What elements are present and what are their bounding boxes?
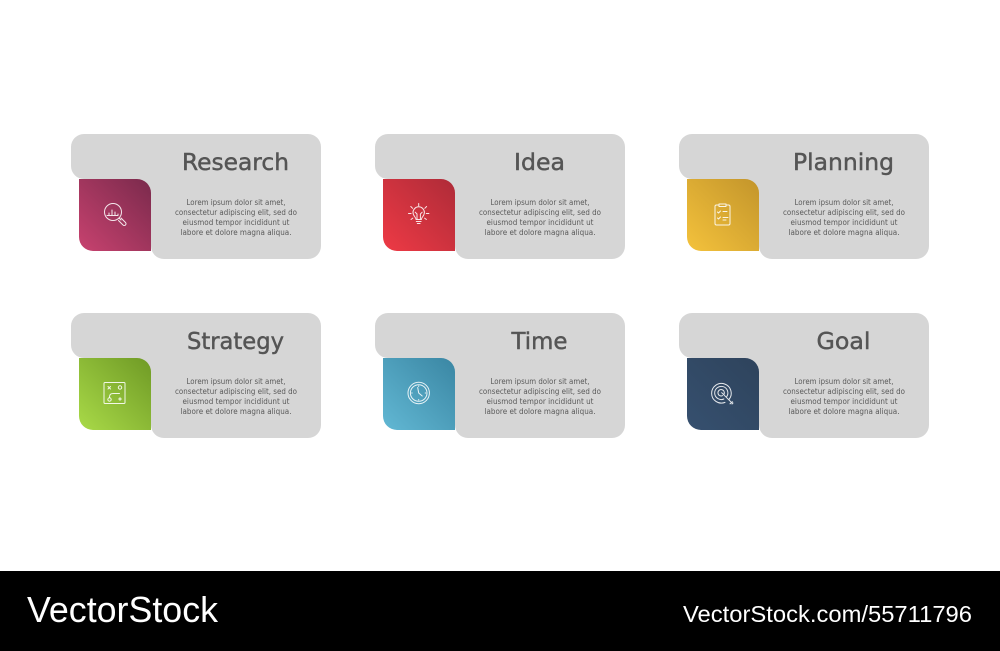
image url text: VectorStock.com/55711796 <box>683 601 972 627</box>
text block: labore et dolore magna aliqua. <box>180 407 292 416</box>
text block: labore et dolore magna aliqua. <box>788 407 900 416</box>
black band <box>0 571 1000 651</box>
card background <box>71 313 321 438</box>
panel: planning <box>679 134 929 259</box>
text block: consectetur adipiscing elit, sed do <box>783 387 905 396</box>
text block: eiusmod tempor incididunt ut <box>790 397 898 406</box>
text block <box>175 198 297 237</box>
heading: Idea <box>514 148 565 176</box>
text block: consectetur adipiscing elit, sed do <box>783 208 905 217</box>
text block: consectetur adipiscing elit, sed do <box>479 387 601 396</box>
icon: clipboard checklist <box>715 204 730 225</box>
text block: Lorem ipsum dolor sit amet, <box>794 198 894 207</box>
text block: Lorem ipsum dolor sit amet, <box>186 377 286 386</box>
heading: Planning <box>793 148 894 176</box>
colored tile <box>687 358 759 430</box>
colored tile <box>687 179 759 251</box>
colored tile <box>79 179 151 251</box>
panel: strategy <box>71 313 321 438</box>
text block <box>783 198 905 237</box>
text block: eiusmod tempor incididunt ut <box>486 218 594 227</box>
card background <box>375 134 625 259</box>
text block: Lorem ipsum dolor sit amet, <box>490 377 590 386</box>
heading: Goal <box>816 327 870 355</box>
text block: consectetur adipiscing elit, sed do <box>175 208 297 217</box>
icon: light bulb <box>408 204 429 224</box>
card background <box>375 313 625 438</box>
text block: labore et dolore magna aliqua. <box>484 407 596 416</box>
text block: labore et dolore magna aliqua. <box>180 228 292 237</box>
text block: eiusmod tempor incididunt ut <box>486 397 594 406</box>
colored tile <box>383 358 455 430</box>
text block: labore et dolore magna aliqua. <box>788 228 900 237</box>
text block <box>783 377 905 416</box>
text block: Lorem ipsum dolor sit amet, <box>490 198 590 207</box>
colored tile <box>383 179 455 251</box>
text block <box>479 198 601 237</box>
logo text: VectorStock <box>27 589 219 630</box>
panel: idea <box>375 134 625 259</box>
panel: goal <box>679 313 929 438</box>
text block: eiusmod tempor incididunt ut <box>790 218 898 227</box>
text block <box>175 377 297 416</box>
text block: eiusmod tempor incididunt ut <box>182 218 290 227</box>
panel: research <box>71 134 321 259</box>
icon: target <box>712 383 733 404</box>
watermark footer band <box>0 571 1000 651</box>
card background <box>71 134 321 259</box>
card background <box>679 134 929 259</box>
text block: Lorem ipsum dolor sit amet, <box>794 377 894 386</box>
icon: magnifier with chart <box>104 204 126 226</box>
panel: time <box>375 313 625 438</box>
icon: strategy board <box>104 382 125 404</box>
text block: consectetur adipiscing elit, sed do <box>479 208 601 217</box>
heading: Time <box>511 327 568 355</box>
card background <box>679 313 929 438</box>
text block: Lorem ipsum dolor sit amet, <box>186 198 286 207</box>
heading: Strategy <box>187 327 284 355</box>
text block: consectetur adipiscing elit, sed do <box>175 387 297 396</box>
text block <box>479 377 601 416</box>
icon: clock <box>408 382 429 404</box>
colored tile <box>79 358 151 430</box>
text block: labore et dolore magna aliqua. <box>484 228 596 237</box>
heading: Research <box>182 148 289 176</box>
text block: eiusmod tempor incididunt ut <box>182 397 290 406</box>
